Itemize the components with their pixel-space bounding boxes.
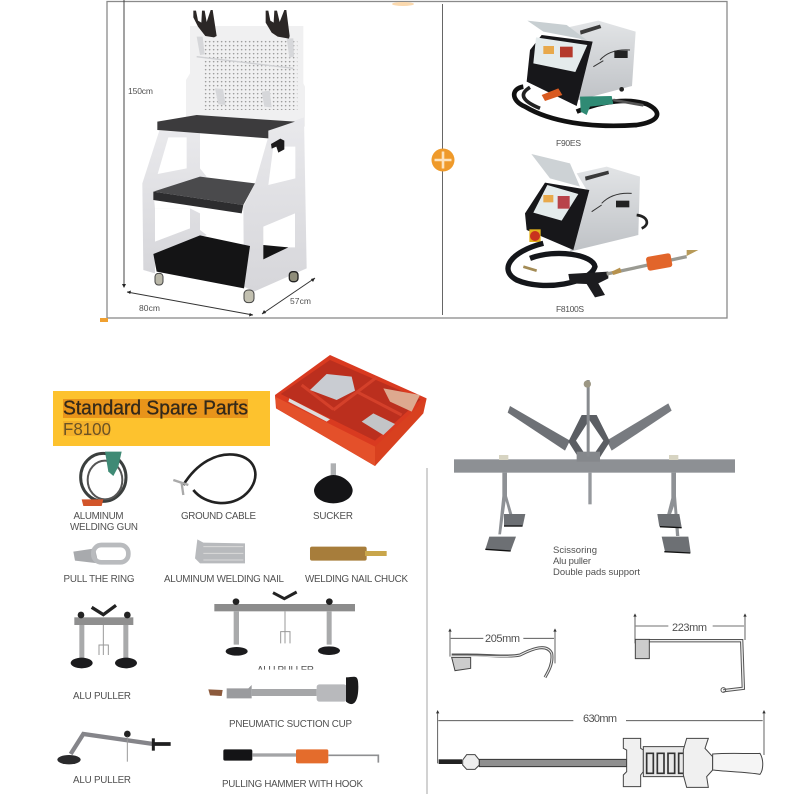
dimension: 80cm width arrow: 80cm xyxy=(139,303,160,313)
heading banner: Standard Spare Parts xyxy=(63,396,248,420)
dimension: 150cm height arrow xyxy=(122,0,153,288)
label: F90ES: F90ES xyxy=(556,138,581,148)
icon: aluminum welding nail xyxy=(195,539,245,563)
cart left side panel xyxy=(142,131,207,273)
puller beam and arms xyxy=(454,380,735,504)
label: F8100S: F8100S xyxy=(556,304,584,314)
label: long alu puller, cut off: ALU PULLER xyxy=(257,665,314,676)
plus icon xyxy=(432,148,454,172)
caption: scissoring alu puller xyxy=(553,545,640,578)
lower spare parts icons xyxy=(57,592,378,764)
left double pad support xyxy=(485,455,525,551)
right double pad support xyxy=(657,455,691,553)
castor wheels xyxy=(155,272,298,303)
label: pull the ring: PULL THE RING xyxy=(64,574,134,585)
dimension: 57cm depth arrow xyxy=(262,278,315,314)
dimension: 80cm width arrow xyxy=(127,290,253,316)
welder F8100S xyxy=(508,154,698,297)
label: sucker: SUCKER xyxy=(313,511,353,522)
dimension: 150cm height arrow: 150cm xyxy=(128,86,153,96)
welder F90ES xyxy=(514,21,657,126)
pegboard backboard xyxy=(186,26,305,127)
upper spare parts icons xyxy=(73,452,387,563)
slide hammer 630mm drawing: 630mm xyxy=(583,713,617,725)
hook 205mm drawing xyxy=(448,628,557,677)
icon: sucker xyxy=(314,463,353,503)
caption: scissoring alu puller: Double pads support xyxy=(553,567,640,578)
label: aluminum welding gun xyxy=(70,511,138,533)
icon: pulling hammer with hook xyxy=(223,749,378,763)
hook 205mm drawing: 205mm xyxy=(485,633,520,645)
icon: angled alu puller xyxy=(57,731,171,764)
bottom shelf xyxy=(153,235,288,288)
label: aluminum welding gun: ALUMINUM xyxy=(74,511,124,522)
label: aluminum welding nail: ALUMINUM WELDING NAIL xyxy=(164,574,285,585)
slide hammer 630mm drawing xyxy=(436,710,766,787)
icon: long alu puller xyxy=(214,592,355,656)
label: angled alu puller: ALU PULLER xyxy=(73,775,131,786)
cart right side panel xyxy=(243,117,307,292)
spare parts box xyxy=(275,355,427,466)
label: short alu puller: ALU PULLER xyxy=(73,691,131,702)
icon: short alu puller xyxy=(71,605,137,668)
heading banner: F8100 xyxy=(63,419,111,439)
caption: scissoring alu puller: Alu puller xyxy=(553,556,591,567)
label: pneumatic suction cup: PNEUMATIC SUCTION CUP xyxy=(229,719,352,730)
label: ground cable: GROUND CABLE xyxy=(181,511,256,522)
panel: product frame xyxy=(100,2,727,322)
panel cut-outs xyxy=(155,137,295,247)
vertical separator xyxy=(426,468,428,794)
heading banner xyxy=(53,391,270,446)
middle shelf xyxy=(153,177,255,213)
caption: scissoring alu puller: Scissoring xyxy=(553,545,597,556)
hook 223mm drawing: 223mm xyxy=(672,622,707,634)
icon: pull the ring xyxy=(73,545,128,563)
black holder hooks xyxy=(193,10,290,39)
hook 223mm drawing xyxy=(633,613,747,692)
label: aluminum welding gun: WELDING GUN xyxy=(70,522,138,533)
tool cart with pegboard xyxy=(142,10,307,303)
shelf lock knob xyxy=(271,139,284,153)
label: pulling hammer with hook: PULLING HAMMER WITH HOOK xyxy=(222,779,363,790)
dimension: 57cm depth arrow: 57cm xyxy=(290,296,311,306)
icon: aluminum welding gun xyxy=(81,452,126,506)
icon: welding nail chuck xyxy=(310,547,387,561)
scissoring alu puller xyxy=(454,380,735,553)
top shelf xyxy=(157,115,295,138)
label: welding nail chuck: WELDING NAIL CHUCK xyxy=(305,574,408,585)
icon: ground cable xyxy=(173,454,255,503)
icon: pneumatic suction cup xyxy=(208,677,358,704)
